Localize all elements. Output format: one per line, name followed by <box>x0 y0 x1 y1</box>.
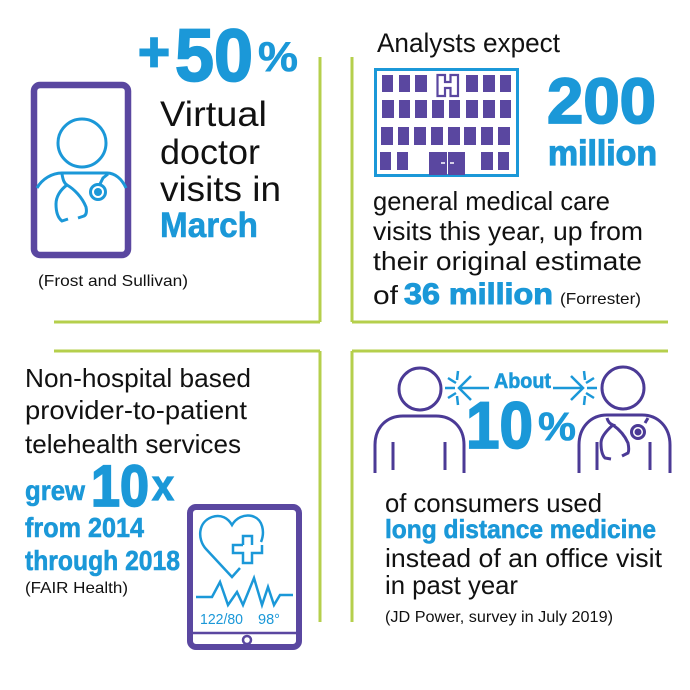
stat: grew 10x from 2014 through 2018: grew <box>25 475 85 506</box>
text: consumers long distance medicine: long distance medicine <box>385 514 656 544</box>
stat: grew 10x from 2014 through 2018: through 2018 <box>25 545 180 576</box>
stat: +50% <box>138 14 298 97</box>
source: JD Power: (JD Power, survey in July 2019) <box>385 609 613 626</box>
source: Frost and Sullivan: (Frost and Sullivan) <box>38 273 188 290</box>
stat: grew 10x from 2014 through 2018: x <box>152 461 174 510</box>
text: consumers long distance medicine: instead of an office visit <box>385 543 663 573</box>
icon: hospital building <box>376 70 518 176</box>
stat: about 10%: About <box>494 370 551 393</box>
panel: analysts expect <box>373 28 657 311</box>
icon: tablet with vitals: 122/80 <box>200 611 243 628</box>
source: FAIR Health: (FAIR Health) <box>25 580 128 597</box>
text: general medical care visits: general medical care <box>373 186 610 216</box>
icon: doctor with stethoscope <box>579 367 670 473</box>
panel: long distance medicine <box>375 367 670 626</box>
text: consumers long distance medicine: of consumers used <box>385 488 602 518</box>
stat: grew 10x from 2014 through 2018: from 2014 <box>25 512 144 543</box>
text: general medical care visits: 36 million <box>404 278 553 311</box>
panel: telehealth growth <box>25 363 299 647</box>
stat: 200 million: 200 <box>547 65 656 137</box>
stat: about 10% <box>466 370 576 462</box>
panel: virtual doctor visits <box>34 14 298 290</box>
text: general medical care visits: visits this year, up from <box>373 216 643 246</box>
icon: tablet with vitals <box>190 507 299 647</box>
arrows: bursts pointing at each person <box>445 371 597 405</box>
stat: about 10%: 10 <box>466 388 533 462</box>
stat: +50%: 50 <box>175 14 253 97</box>
text: virtual doctor visits in March: visits in <box>160 170 281 209</box>
text: virtual doctor visits in March: Virtual <box>160 95 267 134</box>
text: non-hospital telehealth services: provider-to-patient <box>25 395 248 425</box>
text: virtual doctor visits in March: March <box>160 206 258 245</box>
text: general medical care visits: (Forrester) <box>560 291 641 308</box>
heading: analysts expect: Analysts expect <box>377 28 560 58</box>
stat: about 10%: % <box>538 405 576 449</box>
icon: phone with doctor <box>34 85 128 255</box>
stat: 200 million <box>547 65 657 173</box>
stat: grew 10x from 2014 through 2018: 10 <box>91 454 149 519</box>
text: consumers long distance medicine <box>385 488 663 600</box>
icon: tablet with vitals: 98° <box>258 611 280 628</box>
stat: 200 million: million <box>548 134 657 173</box>
text: non-hospital telehealth services: telehealth services <box>25 429 241 459</box>
stat: +50%: + <box>138 20 170 83</box>
text: non-hospital telehealth services <box>25 363 251 459</box>
text: general medical care visits: of <box>373 280 399 310</box>
text: virtual doctor visits in March <box>160 95 281 245</box>
text: general medical care visits: their original estimate <box>373 246 642 276</box>
text: virtual doctor visits in March: doctor <box>160 133 260 172</box>
stat: grew 10x from 2014 through 2018 <box>25 454 180 576</box>
text: non-hospital telehealth services: Non-hospital based <box>25 363 251 393</box>
text: general medical care visits <box>373 186 643 311</box>
stat: +50%: % <box>258 33 298 80</box>
text: consumers long distance medicine: in past year <box>385 570 518 600</box>
icon: patient <box>375 368 464 473</box>
